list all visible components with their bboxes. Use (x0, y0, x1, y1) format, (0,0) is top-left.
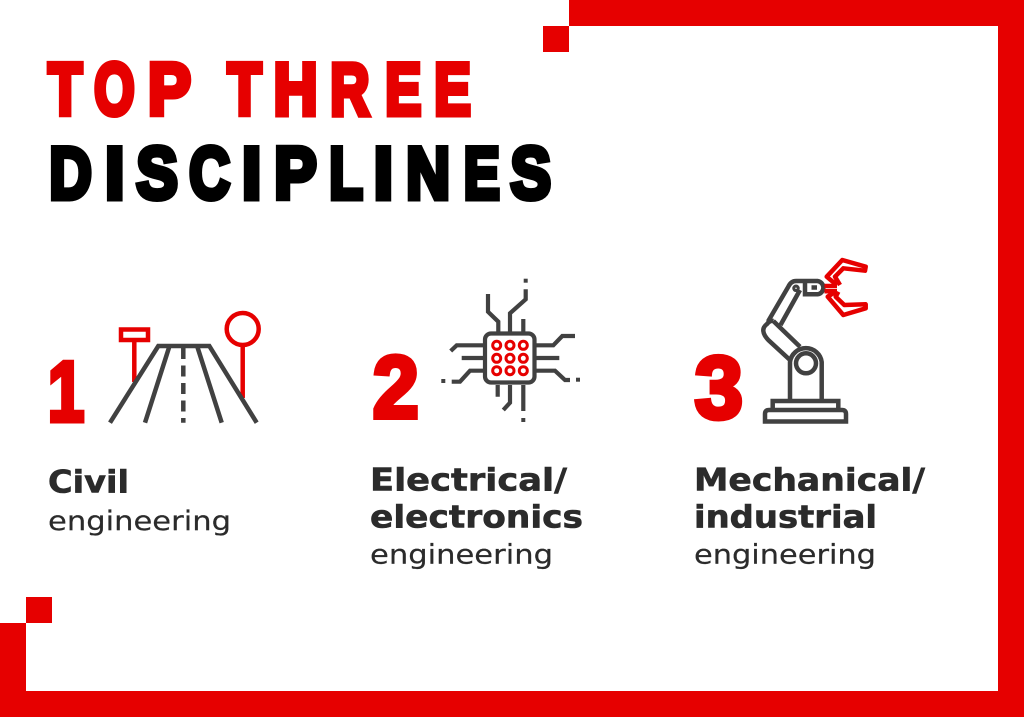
title line: top three: O (94, 50, 135, 130)
title line: disciplines: N (406, 134, 450, 215)
title line: top three: R (330, 48, 369, 130)
label: electrical/electronics engineering: Electrical/ (370, 462, 568, 498)
label: civil engineering (48, 465, 231, 537)
title line: top three: H (274, 49, 318, 131)
title line: disciplines: S (510, 133, 551, 215)
title line: disciplines: I (105, 134, 124, 215)
label: mechanical/industrial engineering (694, 462, 926, 570)
icon: robot arm (763, 260, 866, 422)
title line: top three: E (385, 48, 421, 130)
item 1: civil engineering (48, 313, 259, 537)
title line: top three (48, 48, 471, 131)
label: civil engineering: Civil (48, 465, 129, 501)
title line: top three: T (228, 48, 261, 130)
title line: disciplines: I (374, 134, 393, 215)
label: electrical/electronics engineering: electronics (370, 500, 583, 536)
label: mechanical/industrial engineering: Mechanical/ (694, 462, 926, 498)
item 2: electrical/electronics engineering (370, 279, 583, 570)
title line: top three: T (48, 48, 82, 130)
title (48, 48, 551, 215)
number 3: 3 (695, 340, 743, 437)
title line: disciplines: P (274, 134, 317, 215)
label: electrical/electronics engineering (370, 462, 583, 570)
icon: microchip (441, 279, 580, 422)
number 2: 2 (373, 339, 419, 437)
label: electrical/electronics engineering: engineering (370, 540, 553, 570)
number 1: 1 (48, 345, 84, 440)
title line: disciplines: I (242, 134, 261, 215)
title line: disciplines: L (329, 133, 363, 215)
title line: top three: E (434, 49, 471, 130)
title line: disciplines: D (49, 134, 92, 215)
item 3: mechanical/industrial engineering (694, 260, 926, 570)
title line: disciplines (49, 133, 551, 215)
label: mechanical/industrial engineering: industrial (694, 500, 877, 536)
title line: disciplines: C (189, 133, 230, 214)
title line: disciplines: E (464, 133, 500, 215)
title line: disciplines: S (136, 134, 178, 215)
label: civil engineering: engineering (48, 506, 231, 537)
title line: top three: P (148, 48, 191, 130)
label: mechanical/industrial engineering: engineering (694, 540, 876, 570)
icon: road with signs (110, 313, 259, 423)
